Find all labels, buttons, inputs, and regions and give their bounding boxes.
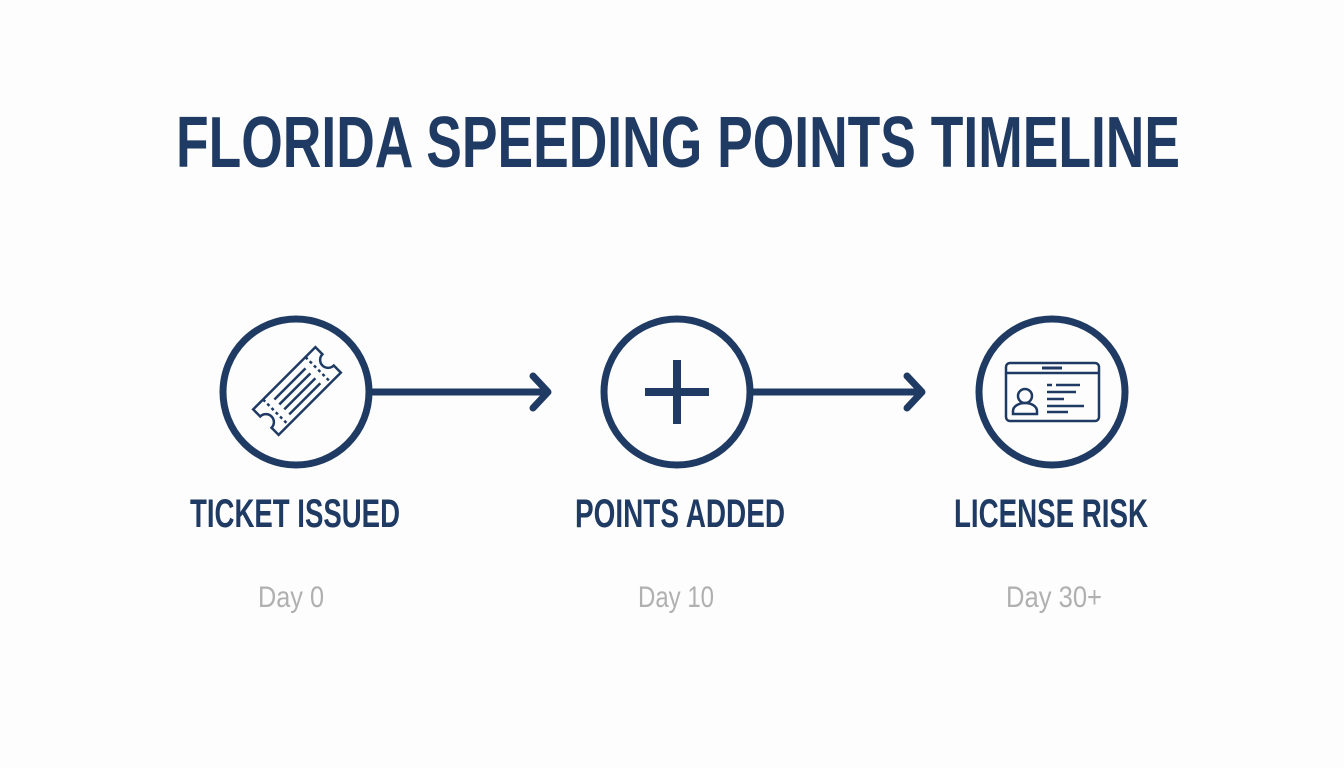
label: ticket issued: TICKET ISSUED [190, 492, 400, 536]
icon: license card circle [979, 319, 1125, 465]
step 3: license risk [954, 319, 1148, 614]
arrow 1 [372, 376, 548, 408]
day 30+: Day 30+ [1006, 581, 1102, 614]
label: license risk: LICENSE RISK [954, 492, 1148, 536]
day 10: Day 10 [638, 581, 714, 614]
day 0: Day 0 [258, 581, 324, 614]
icon: ticket circle [223, 319, 369, 465]
arrow 2 [753, 376, 922, 408]
step 2: points added [575, 319, 785, 614]
icon: plus circle [604, 319, 750, 465]
step 1: ticket issued [190, 319, 400, 614]
label: points added: POINTS ADDED [575, 492, 785, 536]
